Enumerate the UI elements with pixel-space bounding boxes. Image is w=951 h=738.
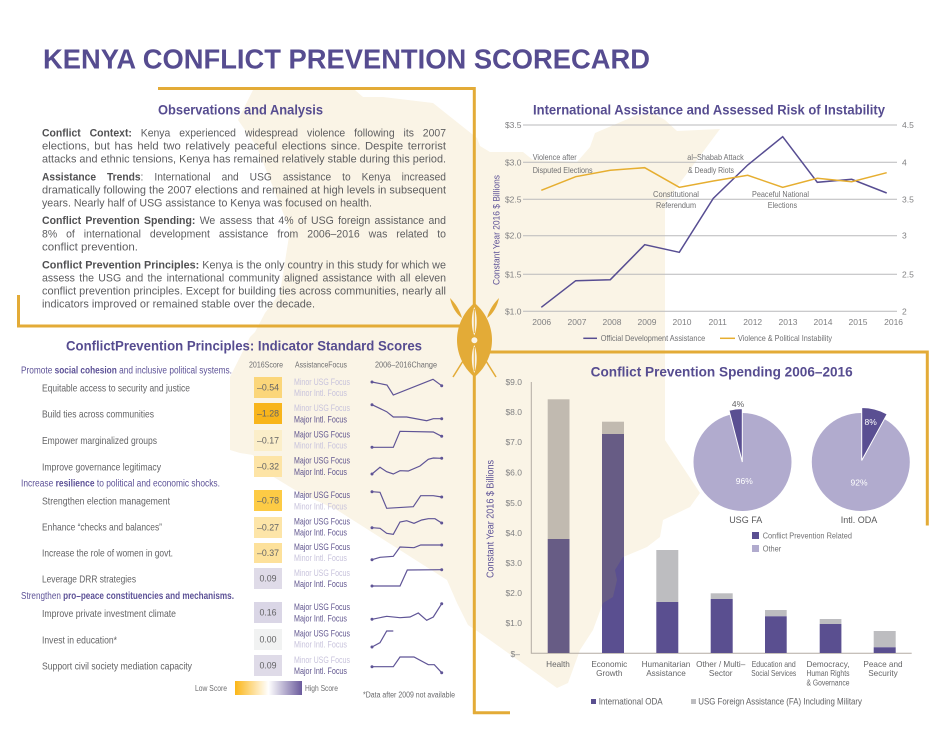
- pie legend: [752, 530, 852, 553]
- line chart gridlines and axes: $1.0: [505, 306, 522, 316]
- row: equitable access: –0.54: [257, 382, 279, 392]
- line chart gridlines and axes: $2.0: [505, 231, 522, 241]
- line: violence and political instability: [541, 168, 887, 190]
- legend: score gradient: High Score: [305, 683, 338, 693]
- row: role of women: Increase the role of women in govt.: [42, 548, 173, 559]
- column headers: [249, 360, 437, 370]
- pie chart: USG FA: USG FA: [729, 515, 762, 525]
- pie chart: international ODA: 8%: [865, 417, 877, 427]
- bar: education: Social Services: [751, 669, 796, 678]
- row: governance legitimacy: Improve governance legitimacy: [42, 462, 162, 473]
- row: role of women: Minor Intl. Focus: [294, 553, 347, 563]
- bar: other multi-sector: [696, 593, 746, 678]
- row: empower marginalized: –0.17: [257, 436, 279, 446]
- pie chart: USG FA: [694, 399, 792, 525]
- row: equitable access: Minor Intl. Focus: [294, 388, 347, 398]
- row: checks and balances: [42, 516, 443, 538]
- text block: conflict prevention principles: Conflict Prevention Principles: Kenya is the only country in this study for which we: [42, 260, 446, 272]
- line chart gridlines and axes: 4: [902, 157, 907, 167]
- row: equitable access: [42, 377, 443, 398]
- row: build ties: Major Intl. Focus: [294, 414, 347, 424]
- row: role of women: [42, 542, 443, 563]
- row: civil society: Major Intl. Focus: [294, 666, 347, 676]
- bar: democracy: Democracy,: [806, 660, 850, 669]
- heading: indicator scores: ConflictPrevention Principles: Indicator Standard Scores: [66, 338, 422, 354]
- pie chart: international ODA: 92%: [850, 478, 868, 488]
- text block: conflict context: Conflict Context: Kenya experienced widespread violence following its 2007: [42, 128, 446, 140]
- text block: conflict context: [42, 128, 447, 166]
- bar chart axes and labels: $8.0: [505, 407, 522, 417]
- text block: conflict context: elections, but has held two relatively peaceful elections since. Despite terrorist: [42, 140, 447, 152]
- bar: peace and security: Security: [868, 669, 899, 678]
- line chart gridlines and axes: [491, 120, 914, 327]
- row: education: [42, 628, 393, 650]
- line chart legend: Violence & Political Instability: [738, 333, 833, 343]
- bar: health: Health: [546, 660, 570, 669]
- line chart gridlines and axes: 2009: [638, 317, 657, 327]
- annotation: peaceful national elections: Peaceful National: [752, 189, 809, 199]
- annotation: al-Shabab attack: al–Shabab Attack: [687, 152, 744, 162]
- line chart gridlines and axes: 2012: [743, 317, 762, 327]
- line chart gridlines and axes: 2: [902, 306, 907, 316]
- text block: conflict prevention principles: assess the USG and the international community aligned assistance with all eleven: [42, 272, 446, 284]
- row: build ties: Build ties across communities: [42, 409, 154, 420]
- line chart gridlines and axes: $2.5: [505, 194, 522, 204]
- row: education: Invest in education*: [42, 635, 117, 646]
- text block: conflict prevention principles: [42, 260, 446, 310]
- bar: education: [751, 610, 796, 678]
- text block: assistance trends: Assistance Trends: International and USG assistance to Kenya increased: [42, 172, 446, 184]
- line chart gridlines and axes: 2011: [709, 317, 727, 327]
- bar: humanitarian: Humanitarian: [642, 660, 691, 669]
- bar chart legend: International ODA: [599, 696, 663, 706]
- line chart legend: Official Development Assistance: [601, 333, 705, 343]
- text block: conflict prevention spending: 8% of international development assistance from 2006–2016 was related to: [42, 228, 446, 240]
- row: role of women: Major USG Focus: [294, 542, 350, 552]
- row: private investment: 0.16: [259, 608, 277, 618]
- row: governance legitimacy: Major USG Focus: [294, 456, 350, 466]
- text block: assistance trends: [42, 172, 447, 210]
- annotation: constitutional referendum: Constitutional: [653, 189, 699, 199]
- annotation: constitutional referendum: [653, 189, 699, 210]
- row: civil society: [42, 655, 443, 676]
- bar chart axes and labels: $4.0: [505, 528, 522, 538]
- pie legend: Other: [763, 543, 781, 553]
- row: checks and balances: Major USG Focus: [294, 516, 350, 526]
- line chart gridlines and axes: $3.5: [505, 120, 522, 130]
- bar: other multi-sector: Other / Multi–: [696, 660, 746, 669]
- row: build ties: [42, 403, 443, 424]
- line chart gridlines and axes: 2.5: [902, 269, 914, 279]
- annotation: violence after disputed elections: Violence after: [533, 152, 577, 162]
- panel: indicator standard scores: [21, 338, 455, 700]
- row: education: Major USG Focus: [294, 628, 350, 638]
- row: private investment: Improve private investment climate: [42, 609, 176, 620]
- bar chart axes and labels: [486, 377, 912, 659]
- row: election management: Minor Intl. Focus: [294, 502, 347, 512]
- row: election management: Strengthen election management: [42, 496, 170, 507]
- bar: health: [546, 399, 570, 669]
- panel: conflict prevention spending: [486, 364, 912, 706]
- line chart gridlines and axes: 2010: [673, 317, 692, 327]
- panel: assistance and risk line chart: [491, 102, 914, 343]
- column headers: AssistanceFocus: [295, 360, 347, 370]
- row: civil society: Minor USG Focus: [294, 655, 350, 665]
- text block: conflict prevention spending: [42, 215, 446, 254]
- text block: assistance trends: years. Nearly half of USG assistance to Kenya was focused on health.: [42, 198, 372, 210]
- column headers: 2016Score: [249, 360, 283, 370]
- row: governance legitimacy: Major Intl. Focus: [294, 467, 347, 477]
- row: checks and balances: –0.27: [257, 522, 279, 532]
- text block: conflict prevention spending: conflict prevention.: [42, 242, 138, 254]
- line chart gridlines and axes: 2014: [814, 317, 833, 327]
- line chart gridlines and axes: 3.5: [902, 194, 914, 204]
- row: DRR strategies: 0.09: [259, 574, 277, 584]
- row: equitable access: Equitable access to security and justice: [42, 383, 190, 394]
- line chart gridlines and axes: 2006: [532, 317, 551, 327]
- row: empower marginalized: [42, 430, 443, 451]
- bar: democracy: & Governance: [806, 678, 850, 687]
- text block: conflict context: attacks and ethnic tensions, Kenya has remained relatively stable during this period.: [42, 154, 446, 166]
- panel: observations and analysis: [42, 102, 447, 310]
- row: checks and balances: Enhance “checks and balances”: [42, 523, 162, 534]
- row: governance legitimacy: [42, 456, 443, 477]
- bar chart axes and labels: $9.0: [505, 377, 522, 387]
- row: education: Minor Intl. Focus: [294, 640, 347, 650]
- bar chart axes and labels: $–: [511, 649, 520, 659]
- bar: humanitarian: Assistance: [646, 669, 686, 678]
- pie chart: USG FA: 4%: [732, 399, 745, 409]
- bar chart axes and labels: $6.0: [505, 468, 522, 478]
- line chart gridlines and axes: 2007: [568, 317, 587, 327]
- line: official development assistance: [541, 137, 887, 307]
- bar: peace and security: Peace and: [863, 660, 903, 669]
- line chart gridlines and axes: Constant Year 2016 $ Billions: [491, 175, 502, 285]
- line chart legend: [583, 333, 833, 343]
- bar chart axes and labels: $7.0: [505, 437, 522, 447]
- line chart gridlines and axes: 4.5: [902, 120, 914, 130]
- section: social cohesion: Promote social cohesion and inclusive political systems.: [21, 365, 232, 376]
- pie legend: Conflict Prevention Related: [763, 530, 852, 540]
- row: DRR strategies: Major Intl. Focus: [294, 579, 347, 589]
- annotation: al-Shabab attack: & Deadly Riots: [688, 165, 734, 175]
- row: private investment: Major Intl. Focus: [294, 614, 347, 624]
- row: civil society: 0.09: [259, 660, 277, 670]
- line chart gridlines and axes: $1.5: [505, 269, 522, 279]
- bar: education: Education and: [752, 660, 796, 669]
- text block: conflict prevention principles: conflict prevention principles. Except for building ties across communities, nearly all: [42, 286, 446, 298]
- bar: humanitarian: [642, 550, 691, 678]
- row: DRR strategies: [42, 568, 443, 589]
- row: role of women: –0.37: [257, 548, 279, 558]
- row: education: 0.00: [259, 634, 277, 644]
- row: empower marginalized: Minor Intl. Focus: [294, 440, 347, 450]
- row: election management: Major USG Focus: [294, 490, 350, 500]
- row: election management: [42, 490, 443, 512]
- row: DRR strategies: Leverage DRR strategies: [42, 574, 136, 585]
- annotation: constitutional referendum: Referendum: [656, 200, 696, 210]
- heading: observations: Observations and Analysis: [158, 102, 323, 118]
- bar: economic growth: Growth: [596, 669, 623, 678]
- row: build ties: –1.28: [257, 408, 279, 418]
- section: resilience: Increase resilience to political and economic shocks.: [21, 478, 220, 490]
- row: build ties: Minor USG Focus: [294, 403, 350, 413]
- bar: economic growth: Economic: [591, 660, 627, 669]
- pie chart: international ODA: [812, 407, 910, 525]
- row: civil society: Support civil society mediation capacity: [42, 661, 193, 672]
- heading: spending: Conflict Prevention Spending 2006–2016: [591, 364, 853, 379]
- annotation: violence after disputed elections: [533, 152, 593, 175]
- heading: line chart: International Assistance and Assessed Risk of Instability: [533, 102, 885, 118]
- bar: other multi-sector: Sector: [709, 669, 733, 678]
- line chart gridlines and axes: $3.0: [505, 157, 522, 167]
- bar chart legend: USG Foreign Assistance (FA) Including Military: [698, 696, 862, 706]
- bar: democracy: [806, 619, 850, 687]
- background map of Kenya: [230, 90, 720, 688]
- line chart gridlines and axes: 2016: [884, 317, 903, 327]
- annotation: peaceful national elections: [752, 189, 809, 210]
- bar chart axes and labels: $1.0: [505, 618, 522, 628]
- line chart gridlines and axes: 2008: [603, 317, 622, 327]
- annotation: violence after disputed elections: Disputed Elections: [533, 165, 593, 175]
- bar chart axes and labels: $3.0: [505, 558, 522, 568]
- row: empower marginalized: Major USG Focus: [294, 430, 350, 440]
- row: checks and balances: Major Intl. Focus: [294, 528, 347, 538]
- bar chart axes and labels: $2.0: [505, 588, 522, 598]
- annotation: al-Shabab attack: [687, 152, 744, 175]
- section: pro-peace: Strengthen pro–peace constituencies and mechanisms.: [21, 591, 234, 602]
- icon: Kenyan shield and spears: [450, 298, 499, 377]
- title: KENYA CONFLICT PREVENTION SCORECARD: [43, 44, 650, 74]
- text block: conflict prevention principles: indicators improved or remained stable over the decade.: [42, 298, 315, 310]
- footnote: *Data after 2009 not available: [363, 690, 455, 700]
- row: election management: –0.78: [257, 496, 279, 506]
- pie chart: international ODA: Intl. ODA: [841, 515, 877, 525]
- text block: assistance trends: dramatically following the 2007 elections and remained at high levels in subsequent: [42, 184, 447, 196]
- bar chart legend: [591, 696, 862, 706]
- legend: score gradient: Low Score: [195, 683, 227, 693]
- row: DRR strategies: Minor USG Focus: [294, 568, 350, 578]
- pie chart: USG FA: 96%: [736, 476, 753, 486]
- text block: conflict prevention spending: Conflict Prevention Spending: We assess that 4% of USG foreign assistance and: [42, 215, 446, 227]
- bar chart axes and labels: $5.0: [505, 498, 522, 508]
- row: governance legitimacy: –0.32: [257, 462, 279, 472]
- row: private investment: Major USG Focus: [294, 602, 350, 612]
- bar: economic growth: [591, 422, 627, 678]
- bar: democracy: Human Rights: [806, 669, 850, 678]
- row: equitable access: Minor USG Focus: [294, 377, 350, 387]
- line chart gridlines and axes: 3: [902, 231, 907, 241]
- annotation: peaceful national elections: Elections: [768, 200, 797, 210]
- bar chart axes and labels: Constant Year 2016 $ Billions: [486, 460, 496, 578]
- row: private investment: [42, 602, 443, 624]
- column headers: 2006–2016Change: [375, 360, 437, 370]
- line chart gridlines and axes: 2013: [779, 317, 798, 327]
- legend: score gradient: [195, 681, 338, 695]
- row: empower marginalized: Empower marginalized groups: [42, 436, 157, 447]
- bar: peace and security: [863, 631, 903, 678]
- line chart gridlines and axes: 2015: [849, 317, 868, 327]
